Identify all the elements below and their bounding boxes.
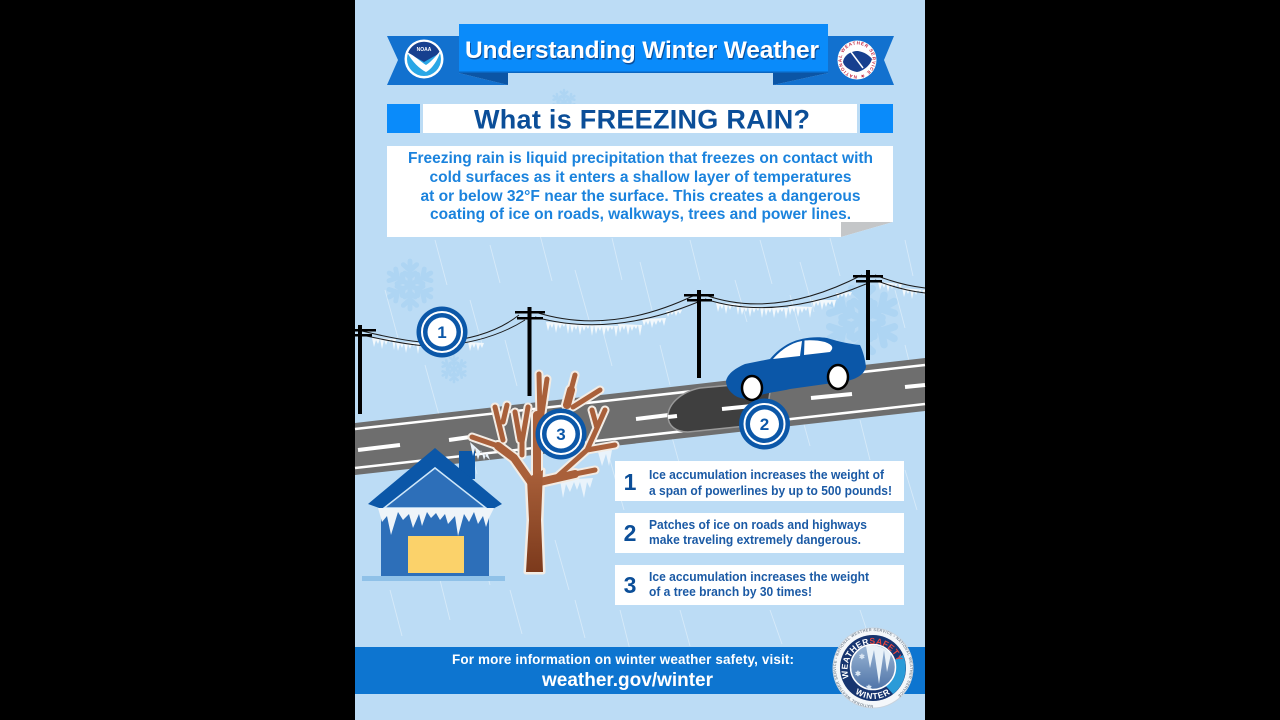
road surface <box>355 358 925 475</box>
fact 3: of a tree branch by 30 times! <box>649 585 812 599</box>
roof <box>368 448 502 511</box>
house ground strip <box>362 576 505 581</box>
car <box>726 337 866 400</box>
description text: coating of ice on roads, walkways, trees and power lines. <box>430 206 851 223</box>
Weather Safety Winter badge: WEATHERSAFETY <box>841 638 903 680</box>
fact 2: 2 <box>624 520 636 546</box>
fact 1: 1 <box>624 469 637 495</box>
house wall <box>381 508 489 576</box>
fact 2 <box>615 513 904 553</box>
tree icicles <box>470 442 612 498</box>
description panel <box>387 146 893 237</box>
road centre dashes <box>358 385 925 450</box>
gable <box>384 468 486 508</box>
fact 3: 3 <box>624 572 636 598</box>
icicles on house <box>378 508 494 536</box>
badge 1 <box>416 306 468 358</box>
rain streaks <box>385 235 917 650</box>
badge 3 <box>536 408 586 460</box>
Weather Safety Winter badge: NATIONAL WEATHER SERVICE • NATIONAL WEATHER SERVICE • NATIONAL WEATHER SERVICE <box>833 628 913 708</box>
background snowflakes <box>386 90 899 382</box>
left square <box>387 104 420 133</box>
fact 1: a span of powerlines by up to 500 pounds! <box>649 484 892 498</box>
footer band <box>355 647 925 694</box>
house <box>362 448 505 581</box>
fact 2: Patches of ice on roads and highways <box>649 518 867 532</box>
fact 1 <box>615 461 904 501</box>
power lines <box>355 270 925 414</box>
tree <box>470 374 615 572</box>
chimney <box>459 451 475 479</box>
fact list <box>615 461 904 605</box>
page-curl corner <box>841 222 893 237</box>
description text <box>408 150 873 223</box>
fact 3 <box>615 565 904 605</box>
icon: NOAA logo <box>404 40 444 78</box>
fact 2: make traveling extremely dangerous. <box>649 533 861 547</box>
badge 1: 1 <box>437 323 447 342</box>
Weather Safety Winter badge: ✱ <box>866 684 872 692</box>
badge 2: 2 <box>760 415 769 434</box>
description text: Freezing rain is liquid precipitation that freezes on contact with <box>408 150 873 167</box>
car wheels <box>742 376 762 400</box>
header ribbon <box>387 24 894 85</box>
description background <box>387 146 893 237</box>
ice patch <box>668 385 770 432</box>
badge 2 <box>739 398 790 450</box>
icon: NOAA logo: NOAA <box>417 47 432 53</box>
description text: cold surfaces as it enters a shallow layer of temperatures <box>430 169 852 186</box>
ribbon main band <box>459 24 828 73</box>
badge 3: 3 <box>556 425 566 444</box>
fact 3: Ice accumulation increases the weight <box>649 570 870 584</box>
ribbon right tail <box>773 36 894 85</box>
ribbon folds <box>459 73 828 85</box>
tree branches <box>472 374 615 488</box>
footer link: weather.gov/winter <box>541 670 714 691</box>
subtitle banner <box>387 104 893 134</box>
ice on power lines <box>372 282 925 354</box>
Weather Safety Winter badge: WINTER <box>856 688 890 699</box>
ribbon left tail <box>387 36 508 85</box>
header title: Understanding Winter Weather <box>466 38 820 66</box>
footer text: For more information on winter weather safety, visit: <box>452 652 794 667</box>
utility poles <box>355 270 883 414</box>
header ribbon: Understanding Winter Weather <box>465 37 819 64</box>
background panel <box>355 0 925 720</box>
tree outline <box>472 374 615 572</box>
tree trunk <box>526 470 543 572</box>
Weather Safety Winter badge: ✱ <box>859 653 865 661</box>
subtitle bar <box>423 104 857 133</box>
window <box>408 536 464 573</box>
subtitle text: What is FREEZING RAIN? <box>474 104 810 134</box>
wires <box>362 275 925 346</box>
road <box>355 358 925 475</box>
road edge lines <box>355 365 925 468</box>
Weather Safety Winter badge: ✱ <box>855 670 861 678</box>
description text: at or below 32°F near the surface. This creates a dangerous <box>420 188 861 205</box>
right square <box>860 104 893 133</box>
icon: National Weather Service logo <box>838 40 876 80</box>
car windows <box>773 340 832 359</box>
fact 1: Ice accumulation increases the weight of <box>649 468 885 482</box>
car body <box>726 337 866 399</box>
